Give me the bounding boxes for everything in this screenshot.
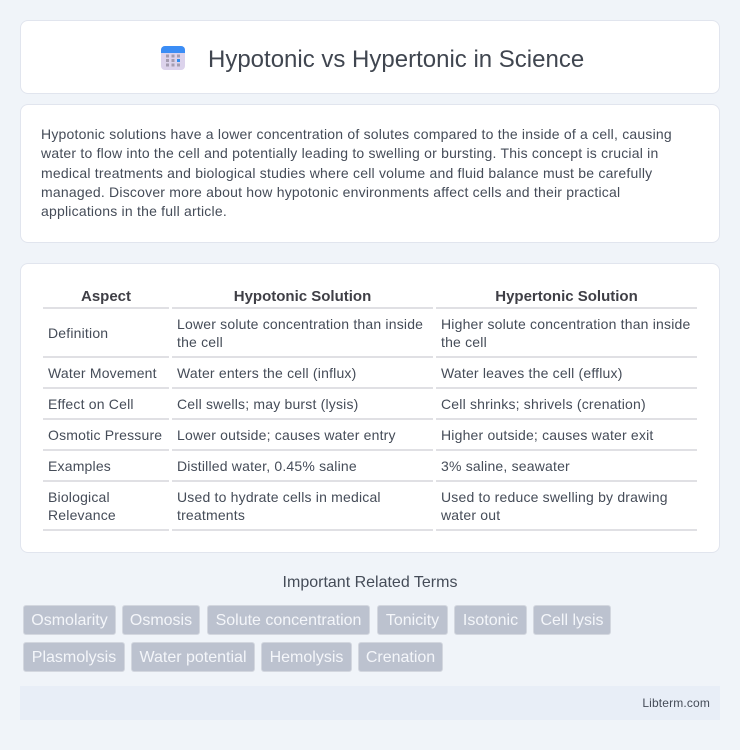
table header row: Aspect — [81, 288, 131, 305]
row: examples: 3% saline, seawater — [441, 458, 570, 474]
row: examples — [48, 458, 570, 474]
intro paragraph: medical treatments and biological studies where cell volume and fluid balance must be carefully — [41, 165, 652, 181]
row: osmotic pressure: Higher outside; causes water exit — [441, 427, 653, 443]
tag: Osmolarity — [23, 605, 116, 635]
row: biological relevance — [48, 489, 668, 523]
tag: Water potential — [131, 642, 255, 672]
row: effect on cell: Cell shrinks; shrivels (crenation) — [441, 396, 646, 412]
tag: Cell lysis — [533, 605, 611, 635]
tag: Solute concentration: Solute concentration — [216, 612, 361, 629]
row: definition: the cell — [177, 334, 223, 350]
row: water movement: Water enters the cell (influx) — [177, 365, 356, 381]
table header row — [81, 288, 638, 305]
table header row: Hypotonic Solution — [234, 288, 371, 305]
title: Hypotonic vs Hypertonic in Science — [208, 46, 584, 73]
tag: Crenation — [358, 642, 443, 672]
intro paragraph — [41, 126, 672, 219]
row: water movement: Water Movement — [48, 365, 157, 381]
row: osmotic pressure — [48, 427, 654, 443]
tag: Hemolysis: Hemolysis — [270, 649, 343, 666]
panel: intro text — [20, 104, 720, 243]
row: definition: Lower solute concentration than inside — [177, 316, 423, 332]
row: biological relevance: Biological — [48, 489, 110, 505]
panel: comparison table — [20, 263, 720, 553]
intro paragraph: water to flow into the cell and potentially leading to swelling or bursting. This concept is crucial in — [41, 145, 658, 161]
tag: Crenation: Crenation — [366, 649, 435, 666]
row: biological relevance: Used to hydrate cells in medical — [177, 489, 381, 505]
tag: Cell lysis: Cell lysis — [540, 612, 604, 629]
row: effect on cell: Cell swells; may burst (lysis) — [177, 396, 358, 412]
row: osmotic pressure: Lower outside; causes water entry — [177, 427, 396, 443]
panel: title header — [20, 20, 720, 94]
intro paragraph: Hypotonic solutions have a lower concentration of solutes compared to the inside of a cell, causing — [41, 126, 672, 142]
footer bar — [20, 686, 720, 720]
intro paragraph: managed. Discover more about how hypotonic environments affect cells and their practical — [41, 184, 620, 200]
tag: Tonicity — [377, 605, 448, 635]
row: effect on cell: Effect on Cell — [48, 396, 134, 412]
footer credit: Libterm.com — [642, 696, 710, 710]
row: biological relevance: water out — [441, 507, 500, 523]
tag: Osmolarity: Osmolarity — [31, 612, 108, 629]
table header row: Hypertonic Solution — [495, 288, 638, 305]
tag: Water potential: Water potential — [139, 649, 246, 666]
row: definition: the cell — [441, 334, 487, 350]
row: water movement — [48, 365, 623, 381]
tag: Osmosis — [122, 605, 200, 635]
heading: related terms: Important Related Terms — [283, 574, 457, 591]
row: osmotic pressure: Osmotic Pressure — [48, 427, 162, 443]
tag: Plasmolysis: Plasmolysis — [32, 649, 116, 666]
row: biological relevance: treatments — [177, 507, 245, 523]
row: effect on cell — [48, 396, 646, 412]
tag: Hemolysis — [261, 642, 352, 672]
row: definition: Definition — [48, 325, 108, 341]
row: definition: Higher solute concentration than inside — [441, 316, 690, 332]
tag: Isotonic — [454, 605, 527, 635]
tag: Solute concentration — [207, 605, 370, 635]
row: biological relevance: Used to reduce swelling by drawing — [441, 489, 668, 505]
tag group: related terms — [23, 605, 611, 672]
row: definition — [48, 316, 690, 350]
icon: calendar grid — [161, 46, 185, 70]
row: water movement: Water leaves the cell (efflux) — [441, 365, 623, 381]
row: biological relevance: Relevance — [48, 507, 116, 523]
row: examples: Examples — [48, 458, 111, 474]
tag: Isotonic: Isotonic — [463, 612, 518, 629]
tag: Tonicity: Tonicity — [386, 612, 439, 629]
tag: Plasmolysis — [23, 642, 125, 672]
intro paragraph: applications in the full article. — [41, 203, 227, 219]
row: examples: Distilled water, 0.45% saline — [177, 458, 357, 474]
tag: Osmosis: Osmosis — [130, 612, 192, 629]
